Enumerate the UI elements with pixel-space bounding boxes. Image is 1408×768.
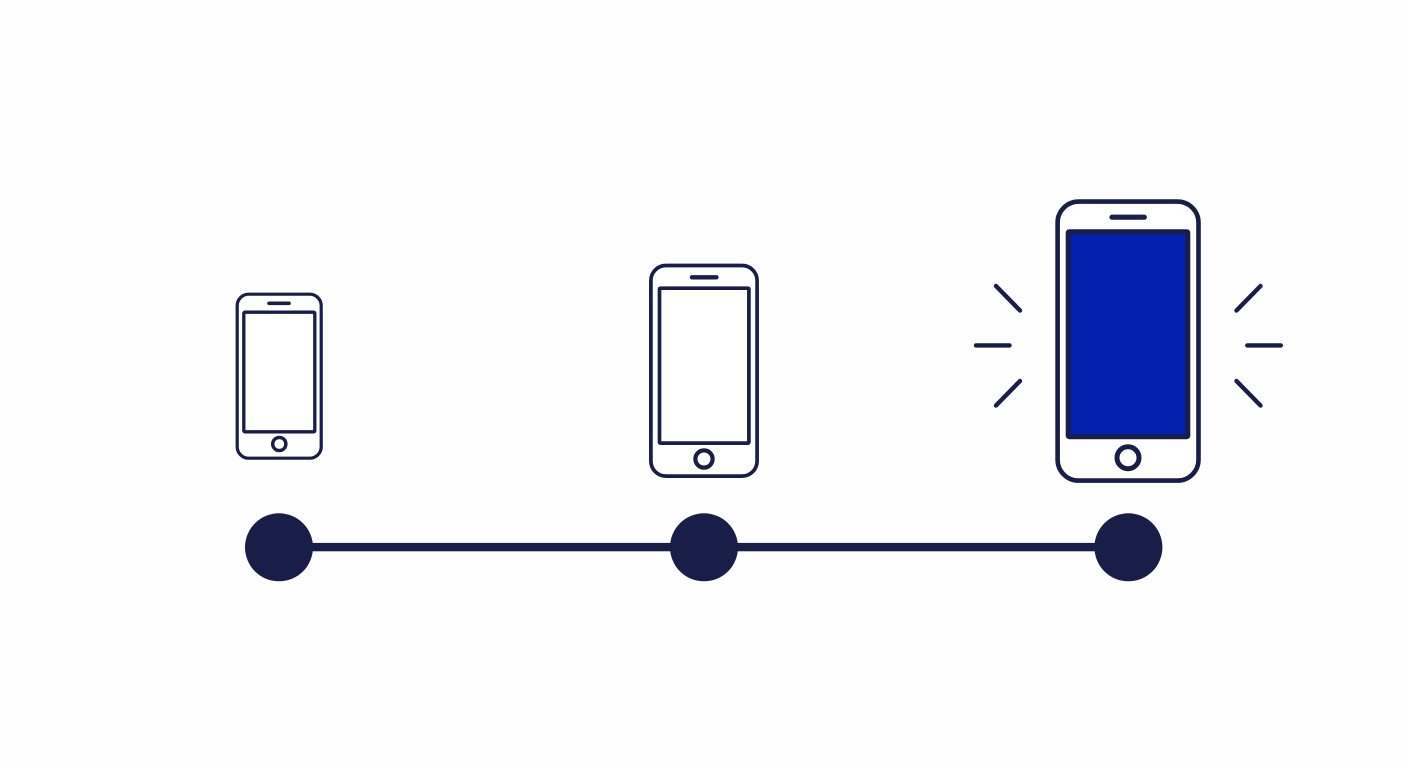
blue screen (1068, 232, 1188, 437)
icon: small phone with empty screen (237, 294, 321, 458)
icon: medium phone with empty screen (651, 266, 757, 476)
icon: large phone with lit blue screen (1058, 202, 1198, 481)
icon: vibration rays around large phone (976, 286, 1281, 406)
timeline with three nodes (245, 513, 1162, 581)
